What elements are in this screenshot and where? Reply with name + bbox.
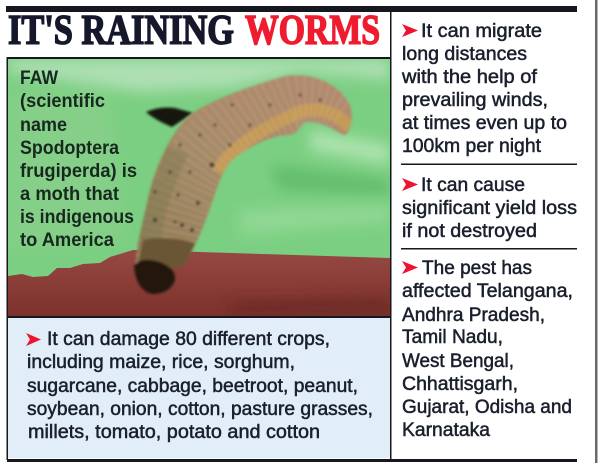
crops text: soybean, onion, cotton, pasture grasses, bbox=[27, 398, 373, 420]
panel: crops bbox=[8, 318, 390, 458]
fact: migration: 100km per night bbox=[402, 135, 542, 157]
title: IT'S RAINING bbox=[8, 8, 234, 54]
photo caption: is indigenous bbox=[20, 207, 134, 228]
fact: affected states: Tamil Nadu, bbox=[402, 326, 503, 348]
fact: yield loss: significant yield loss bbox=[402, 197, 577, 219]
fact: affected states: The pest has bbox=[422, 257, 532, 279]
fact: yield loss: It can cause bbox=[421, 174, 525, 196]
crops text: millets, tomato, potato and cotton bbox=[28, 421, 320, 443]
photo caption: frugiperda) is bbox=[20, 161, 137, 182]
fact: affected states: Karnataka bbox=[402, 419, 490, 441]
fact: affected states: Gujarat, Odisha and bbox=[402, 396, 572, 418]
fact: affected states: Chhattisgarh, bbox=[402, 373, 518, 395]
fact: migration: prevailing winds, bbox=[402, 89, 548, 111]
icon: red arrow bbox=[26, 333, 41, 346]
caterpillar spots bbox=[153, 94, 322, 232]
fact: affected states: affected Telangana, bbox=[402, 280, 573, 302]
crops text: including maize, rice, sorghum, bbox=[27, 351, 295, 373]
photo caption bbox=[20, 68, 137, 251]
caterpillar bbox=[134, 75, 352, 294]
leaf bbox=[8, 59, 390, 277]
fact: migration: at times even up to bbox=[402, 112, 567, 134]
fact: migration: It can migrate bbox=[421, 20, 542, 42]
photo caption: name bbox=[20, 115, 67, 136]
fact: yield loss bbox=[402, 174, 577, 242]
photo caption: a moth that bbox=[20, 184, 120, 205]
photo caption: to America bbox=[20, 230, 114, 251]
crops text: It can damage 80 different crops, bbox=[47, 328, 330, 350]
photo caption: FAW bbox=[20, 68, 58, 89]
photo caption: Spodoptera bbox=[20, 138, 119, 159]
caterpillar head bbox=[137, 238, 195, 268]
crops text: sugarcane, cabbage, beetroot, peanut, bbox=[27, 375, 358, 397]
fact: affected states bbox=[402, 257, 573, 441]
crops text bbox=[27, 328, 373, 443]
fact: yield loss: if not destroyed bbox=[402, 220, 537, 242]
icon: red arrow bbox=[402, 24, 418, 37]
icon: red arrow bbox=[402, 261, 418, 274]
fact: migration: with the help of bbox=[401, 66, 538, 88]
photo caption: (scientific bbox=[20, 91, 105, 112]
fact: migration: long distances bbox=[402, 43, 527, 65]
title: WORMS bbox=[245, 8, 380, 54]
leaf highlights bbox=[8, 59, 390, 316]
panel: caterpillar photo bbox=[8, 59, 390, 316]
leaf hole bbox=[146, 108, 193, 127]
fact: affected states: West Bengal, bbox=[402, 350, 514, 372]
icon: red arrow bbox=[402, 178, 418, 191]
fact: affected states: Andhra Pradesh, bbox=[402, 304, 545, 326]
fact: migration bbox=[401, 20, 567, 157]
